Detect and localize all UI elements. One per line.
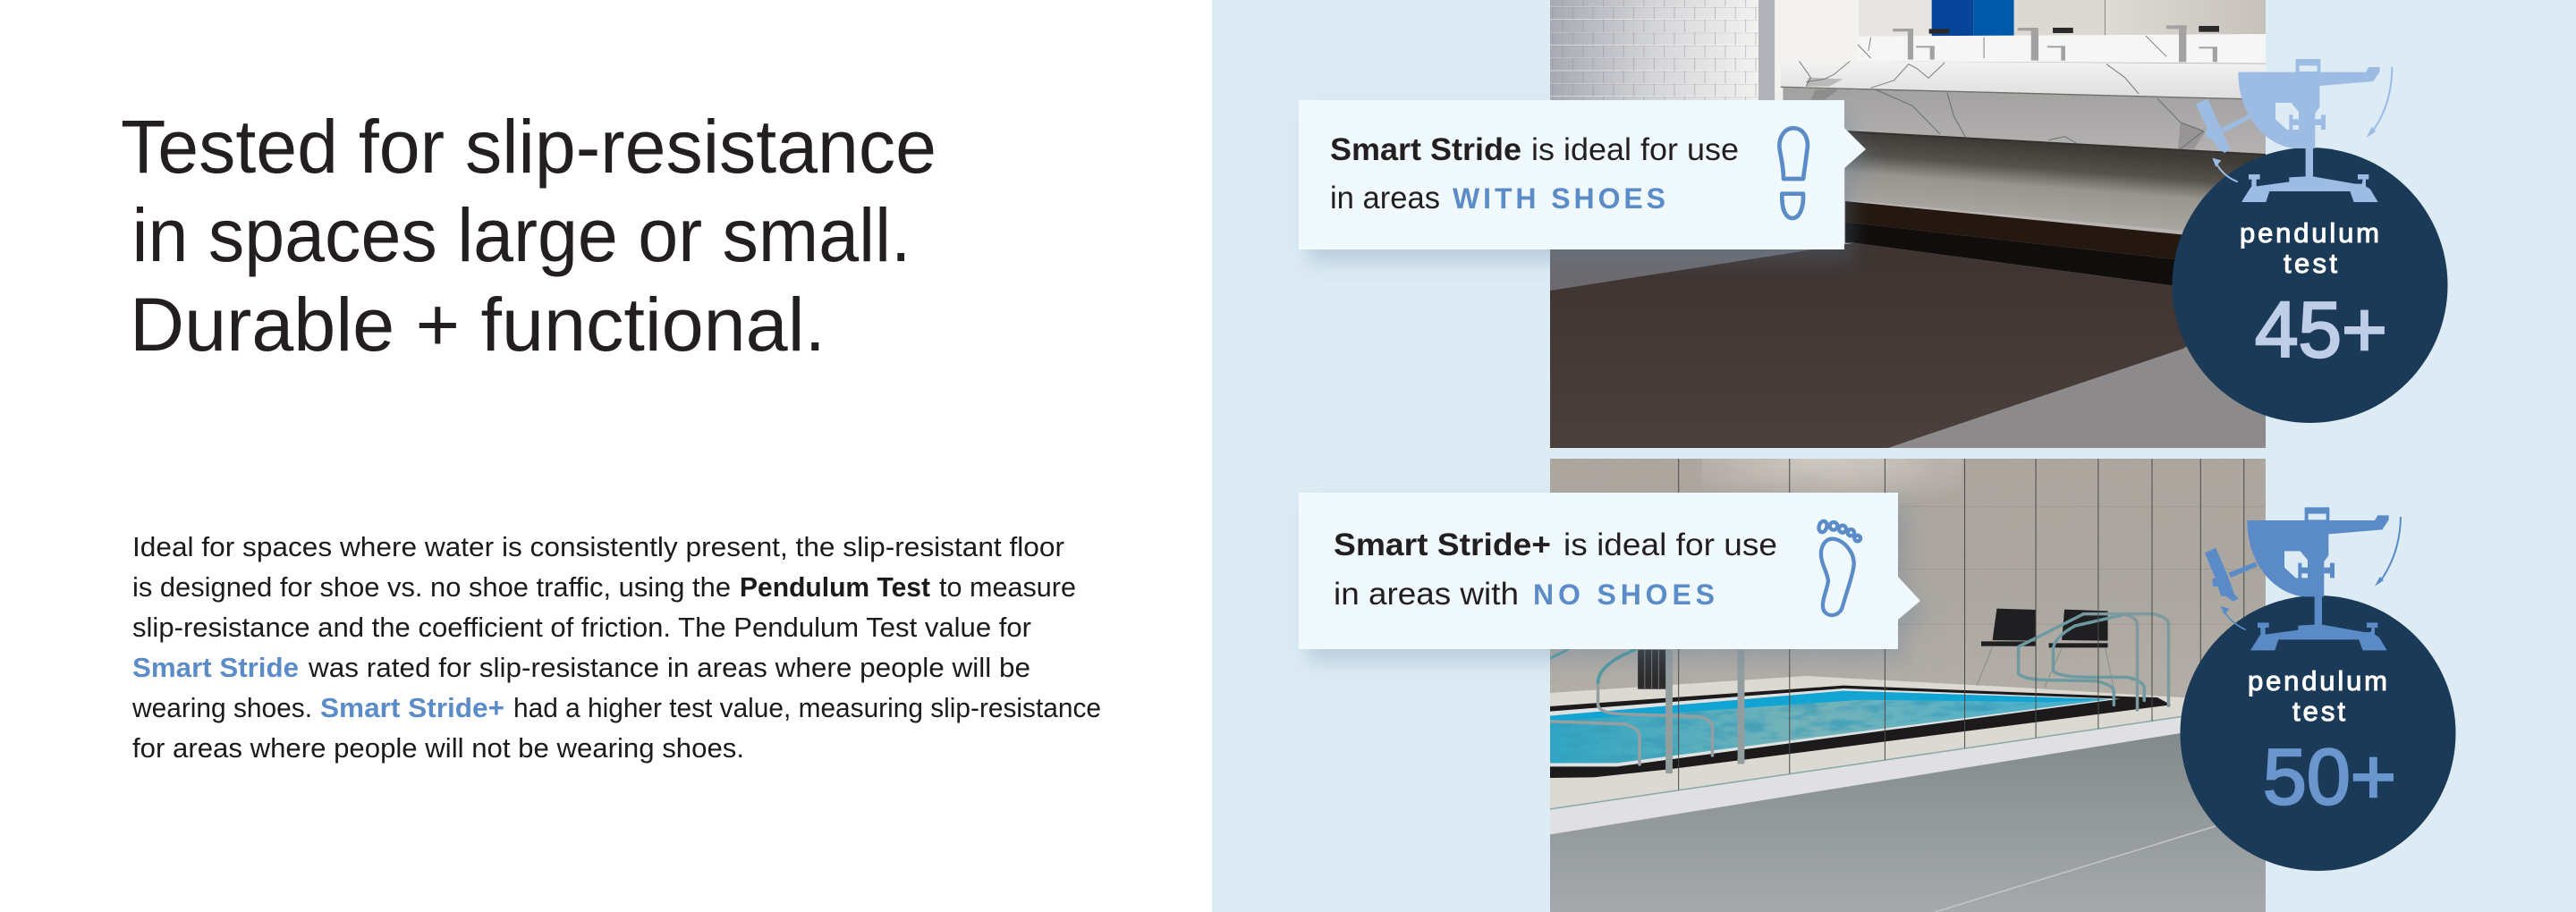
heading: in spaces large or small. — [132, 193, 911, 277]
badge value: 45+ — [2255, 285, 2387, 374]
badge label — [2248, 665, 2387, 727]
icon: pendulum tester dark — [2205, 507, 2401, 650]
photo: indoor pool with grey floor — [1546, 456, 2275, 912]
body text: Smart Stride+ — [320, 692, 504, 723]
icon: bare foot print — [1818, 520, 1860, 615]
body text: wearing shoes. — [131, 692, 312, 723]
body text — [131, 531, 1101, 764]
badge label — [2240, 217, 2379, 279]
badge label: test — [2284, 248, 2337, 279]
callout text: with shoes: WITH SHOES — [1453, 182, 1665, 215]
badge: pendulum test 45+ — [2172, 59, 2447, 423]
callout text: with shoes: is ideal for use — [1531, 132, 1739, 167]
callout text: with shoes — [1330, 132, 1739, 215]
photo: restroom vanity with brown floor — [1547, 0, 2286, 448]
icon: shoe print — [1779, 128, 1808, 218]
badge value: 50+ — [2263, 732, 2396, 821]
callout text: no shoes — [1334, 528, 1777, 612]
body text: had a higher test value, measuring slip-resistance — [513, 692, 1101, 723]
callout text: with shoes: in areas — [1330, 181, 1440, 215]
body text: Ideal for spaces where water is consistently present, the slip-resistant floor — [132, 531, 1064, 562]
body text: Smart Stride — [132, 652, 299, 683]
callout text: no shoes: is ideal for use — [1563, 528, 1777, 562]
callout text: no shoes: Smart Stride+ — [1334, 528, 1551, 562]
heading: Durable + functional. — [130, 283, 826, 367]
heading: Tested for slip-resistance — [121, 105, 936, 189]
icon: pendulum tester light — [2196, 59, 2392, 202]
badge label: pendulum — [2240, 217, 2379, 249]
badge label: pendulum — [2248, 665, 2387, 697]
callout: Smart Stride with shoes — [1299, 100, 1866, 249]
background panel — [1212, 0, 2576, 912]
callout text: no shoes: NO SHOES — [1533, 578, 1715, 611]
callout text: no shoes: in areas with — [1334, 577, 1519, 612]
body text: is designed for shoe vs. no shoe traffic, using the — [132, 571, 731, 603]
heading — [121, 105, 936, 367]
callout: Smart Stride+ no shoes — [1299, 493, 1920, 649]
body text: for areas where people will not be wearing shoes. — [132, 732, 744, 764]
body text: was rated for slip-resistance in areas where people will be — [308, 652, 1030, 683]
callout text: with shoes: Smart Stride — [1330, 132, 1521, 167]
badge: pendulum test 50+ — [2181, 507, 2456, 871]
body text: slip-resistance and the coefficient of friction. The Pendulum Test value for — [132, 612, 1031, 643]
badge label: test — [2292, 696, 2345, 727]
body text: to measure — [939, 571, 1076, 603]
body text: Pendulum Test — [740, 571, 930, 603]
